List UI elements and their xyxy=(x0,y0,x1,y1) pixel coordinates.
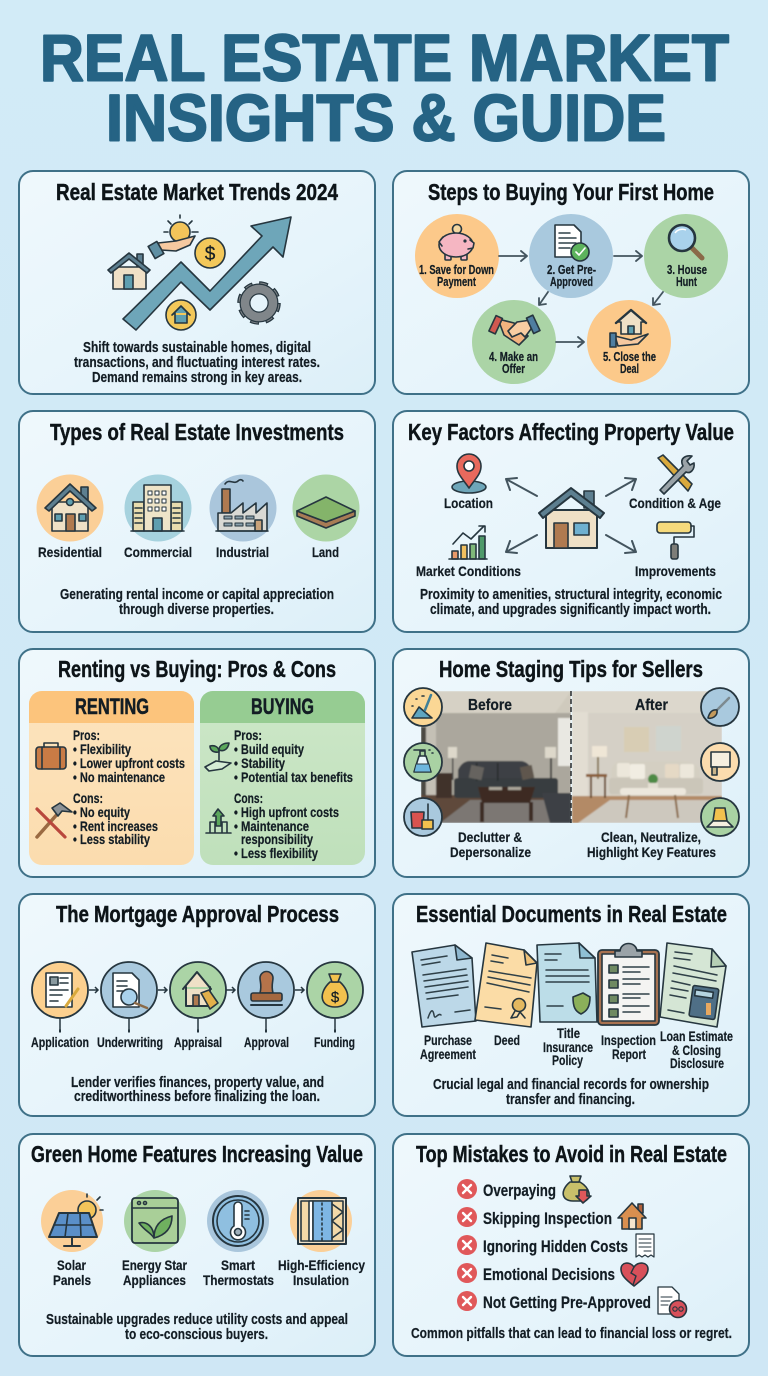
panel: property value factors xyxy=(393,411,749,632)
panel: renting vs buying xyxy=(19,649,375,877)
feature: energy star appliances: Appliances xyxy=(123,1272,186,1288)
factor: improvements: Improvements xyxy=(635,563,716,579)
step: funding: $ xyxy=(331,989,340,1006)
step 5: 5. Close the xyxy=(603,350,656,364)
panel: essential documents xyxy=(393,894,749,1116)
title: INSIGHTS & GUIDE xyxy=(106,80,666,154)
column: renting: • Rent increases xyxy=(73,818,158,834)
icon: rising arrow xyxy=(123,217,291,330)
panel: mortgage process xyxy=(19,894,375,1116)
mistake: overpaying xyxy=(457,1176,591,1203)
step 1: Payment xyxy=(437,275,477,289)
heading: mortgage process: The Mortgage Approval Process xyxy=(56,901,339,927)
icon: house coin xyxy=(166,300,196,330)
arrows: step flow xyxy=(499,251,663,347)
icon: cleaning supplies xyxy=(404,798,442,836)
column: renting: Cons: xyxy=(73,790,103,806)
feature: smart thermostats: Thermostats xyxy=(203,1272,274,1288)
description xyxy=(420,587,722,618)
title: REAL ESTATE MARKET xyxy=(40,20,729,94)
icon: dollar coin: $ xyxy=(205,244,216,265)
step 2: 2. Get Pre- xyxy=(547,263,596,277)
feature: insulation: High-Efficiency xyxy=(278,1257,365,1273)
mistake: hidden costs: Ignoring Hidden Costs xyxy=(483,1237,628,1256)
icon: hand with sun xyxy=(148,215,198,259)
description: creditworthiness before finalizing the loan. xyxy=(74,1089,320,1105)
feature: energy star appliances xyxy=(122,1190,187,1288)
column: buying: Cons: xyxy=(234,790,263,806)
description: Generating rental income or capital appreciation xyxy=(60,587,334,603)
icon: spotlight xyxy=(701,798,739,836)
step 3: 3. House xyxy=(667,263,707,277)
feature: solar panels: Panels xyxy=(53,1272,91,1288)
document: deed xyxy=(475,943,537,1027)
step 5 xyxy=(587,300,671,384)
column: renting: • Flexibility xyxy=(73,741,131,757)
feature: insulation xyxy=(278,1190,365,1288)
step 4: 4. Make an xyxy=(489,350,538,364)
step 3: Hunt xyxy=(676,275,698,289)
column: buying xyxy=(200,691,365,865)
mistake: skipping inspection xyxy=(457,1203,646,1229)
icon: central house xyxy=(539,488,604,548)
step labels: Underwriting xyxy=(97,1034,163,1050)
arrows: value factors xyxy=(506,478,636,553)
step labels: Application xyxy=(31,1034,89,1050)
description: through diverse properties. xyxy=(119,602,274,618)
document labels: Report xyxy=(612,1046,646,1062)
document labels: Loan Estimate xyxy=(660,1028,733,1044)
mistake: not pre-approved xyxy=(457,1287,686,1318)
type: industrial xyxy=(210,474,276,560)
step 4: Offer xyxy=(502,362,525,376)
document: loan estimate xyxy=(660,943,726,1027)
document labels: & Closing xyxy=(672,1042,721,1058)
captions: Clean, Neutralize, xyxy=(601,829,701,845)
step 5: Deal xyxy=(620,362,639,376)
feature: energy star appliances: Energy Star xyxy=(122,1257,187,1273)
column: renting: RENTING xyxy=(75,694,149,719)
step labels xyxy=(31,1034,355,1050)
captions: Highlight Key Features xyxy=(587,844,716,860)
panel: home staging xyxy=(393,649,749,877)
document: inspection report xyxy=(598,944,659,1025)
step labels: Appraisal xyxy=(174,1034,222,1050)
label: after: After xyxy=(635,697,668,714)
type: industrial: Industrial xyxy=(216,544,269,560)
mistake: hidden costs xyxy=(457,1234,654,1257)
column: buying: • Potential tax benefits xyxy=(234,769,353,785)
column: buying: Pros: xyxy=(234,727,262,743)
heading: investment types: Types of Real Estate Investments xyxy=(50,419,344,445)
column: renting xyxy=(29,691,194,865)
column: renting: Pros: xyxy=(73,727,100,743)
document labels: Deed xyxy=(494,1032,520,1048)
panel: top mistakes xyxy=(393,1134,749,1356)
captions xyxy=(450,829,716,860)
heading: renting vs buying: Renting vs Buying: Pros & Cons xyxy=(58,656,336,682)
description xyxy=(433,1077,709,1108)
icon: spray bottle xyxy=(404,743,442,781)
document: title insurance xyxy=(537,943,597,1022)
feature: smart thermostats: Smart xyxy=(221,1257,255,1273)
label: before: Before xyxy=(468,697,512,714)
description: transfer and financing. xyxy=(506,1092,635,1108)
factor: improvements xyxy=(635,522,716,579)
column: buying: • Build equity xyxy=(234,741,304,757)
icon: swatch xyxy=(701,743,739,781)
description xyxy=(60,587,334,618)
icon: gear xyxy=(241,285,277,321)
description xyxy=(74,340,320,386)
document labels: Purchase xyxy=(424,1032,472,1048)
document: purchase agreement xyxy=(412,945,476,1027)
document labels: Title xyxy=(557,1025,580,1041)
type: land: Land xyxy=(312,544,339,560)
document labels: Policy xyxy=(552,1052,583,1068)
factor: location: Location xyxy=(444,495,493,511)
column: buying: • Less flexibility xyxy=(234,845,318,861)
step labels: Approval xyxy=(244,1034,289,1050)
step 2: Approved xyxy=(550,275,593,289)
column: buying: • Stability xyxy=(234,755,285,771)
description: Lender verifies finances, property value, and xyxy=(71,1075,324,1091)
panel: first home steps xyxy=(393,171,749,394)
document labels: Disclosure xyxy=(670,1055,724,1071)
document labels: Inspection xyxy=(601,1032,656,1048)
mistake: overpaying: Overpaying xyxy=(483,1181,556,1200)
icon: declutter xyxy=(404,688,442,726)
feature: solar panels: Solar xyxy=(57,1257,86,1273)
photo: before room xyxy=(421,691,571,823)
captions: Depersonalize xyxy=(450,844,531,860)
heading: green features: Green Home Features Increasing Value xyxy=(31,1141,363,1167)
feature: insulation: Insulation xyxy=(293,1272,349,1288)
factor: condition and age xyxy=(629,455,721,511)
step: approval xyxy=(238,962,294,1018)
column: renting: • Less stability xyxy=(73,831,150,847)
panel: green features xyxy=(19,1134,375,1356)
step: application xyxy=(32,962,88,1018)
document labels xyxy=(420,1025,733,1071)
factor: market conditions: Market Conditions xyxy=(416,563,521,579)
description: to eco-conscious buyers. xyxy=(125,1327,268,1343)
step: appraisal xyxy=(170,962,226,1018)
column: buying: • High upfront costs xyxy=(234,804,339,820)
type: commercial: Commercial xyxy=(124,544,192,560)
column: renting: • No equity xyxy=(73,804,130,820)
description: Demand remains strong in key areas. xyxy=(92,370,302,386)
step labels: Funding xyxy=(314,1034,355,1050)
step 1: 1. Save for Down xyxy=(419,263,494,277)
feature: smart thermostats xyxy=(203,1190,274,1288)
step 1 xyxy=(415,214,499,298)
step: underwriting xyxy=(101,962,157,1018)
heading: home staging: Home Staging Tips for Sellers xyxy=(439,656,703,682)
mistake: emotional decisions: Emotional Decisions xyxy=(483,1265,615,1284)
description: Shift towards sustainable homes, digital xyxy=(83,340,311,356)
step 4 xyxy=(472,300,556,384)
column: buying: • Maintenance xyxy=(234,818,309,834)
panel: market trends xyxy=(19,171,375,394)
step: funding xyxy=(307,962,363,1018)
step 2 xyxy=(529,214,613,298)
icon: dollar coin xyxy=(195,238,225,268)
icon: house xyxy=(108,253,150,289)
photo: after room xyxy=(572,691,722,823)
description: Crucial legal and financial records for ownership xyxy=(433,1077,709,1093)
feature: solar panels xyxy=(41,1190,103,1288)
column: buying: responsibility xyxy=(241,831,313,847)
factor: condition and age: Condition & Age xyxy=(629,495,721,511)
step 3 xyxy=(644,214,728,298)
factor: market conditions xyxy=(416,526,521,579)
icon: paint brush xyxy=(701,688,739,726)
heading: market trends: Real Estate Market Trends 2024 xyxy=(56,179,338,205)
column: renting: • Lower upfront costs xyxy=(73,755,185,771)
connectors: process flow xyxy=(59,987,336,1032)
description: Sustainable upgrades reduce utility costs and appeal xyxy=(46,1312,348,1328)
description: climate, and upgrades significantly impact worth. xyxy=(430,602,711,618)
type: residential xyxy=(36,474,104,560)
mistake: not pre-approved: Not Getting Pre-Approved xyxy=(483,1293,651,1312)
mistake: skipping inspection: Skipping Inspection xyxy=(483,1209,612,1228)
title xyxy=(40,20,729,154)
type: residential: Residential xyxy=(38,544,102,560)
type: commercial xyxy=(124,474,192,560)
description xyxy=(71,1075,324,1105)
description xyxy=(46,1312,348,1343)
type: land xyxy=(292,474,360,560)
document labels: Agreement xyxy=(420,1046,476,1062)
panel: investment types xyxy=(19,411,375,632)
factor: location xyxy=(444,454,493,511)
column: renting: • No maintenance xyxy=(73,769,165,785)
captions: Declutter & xyxy=(458,829,522,845)
document labels: Insurance xyxy=(543,1039,593,1055)
description: transactions, and fluctuating interest rates. xyxy=(74,355,320,371)
column: buying: BUYING xyxy=(251,694,314,719)
